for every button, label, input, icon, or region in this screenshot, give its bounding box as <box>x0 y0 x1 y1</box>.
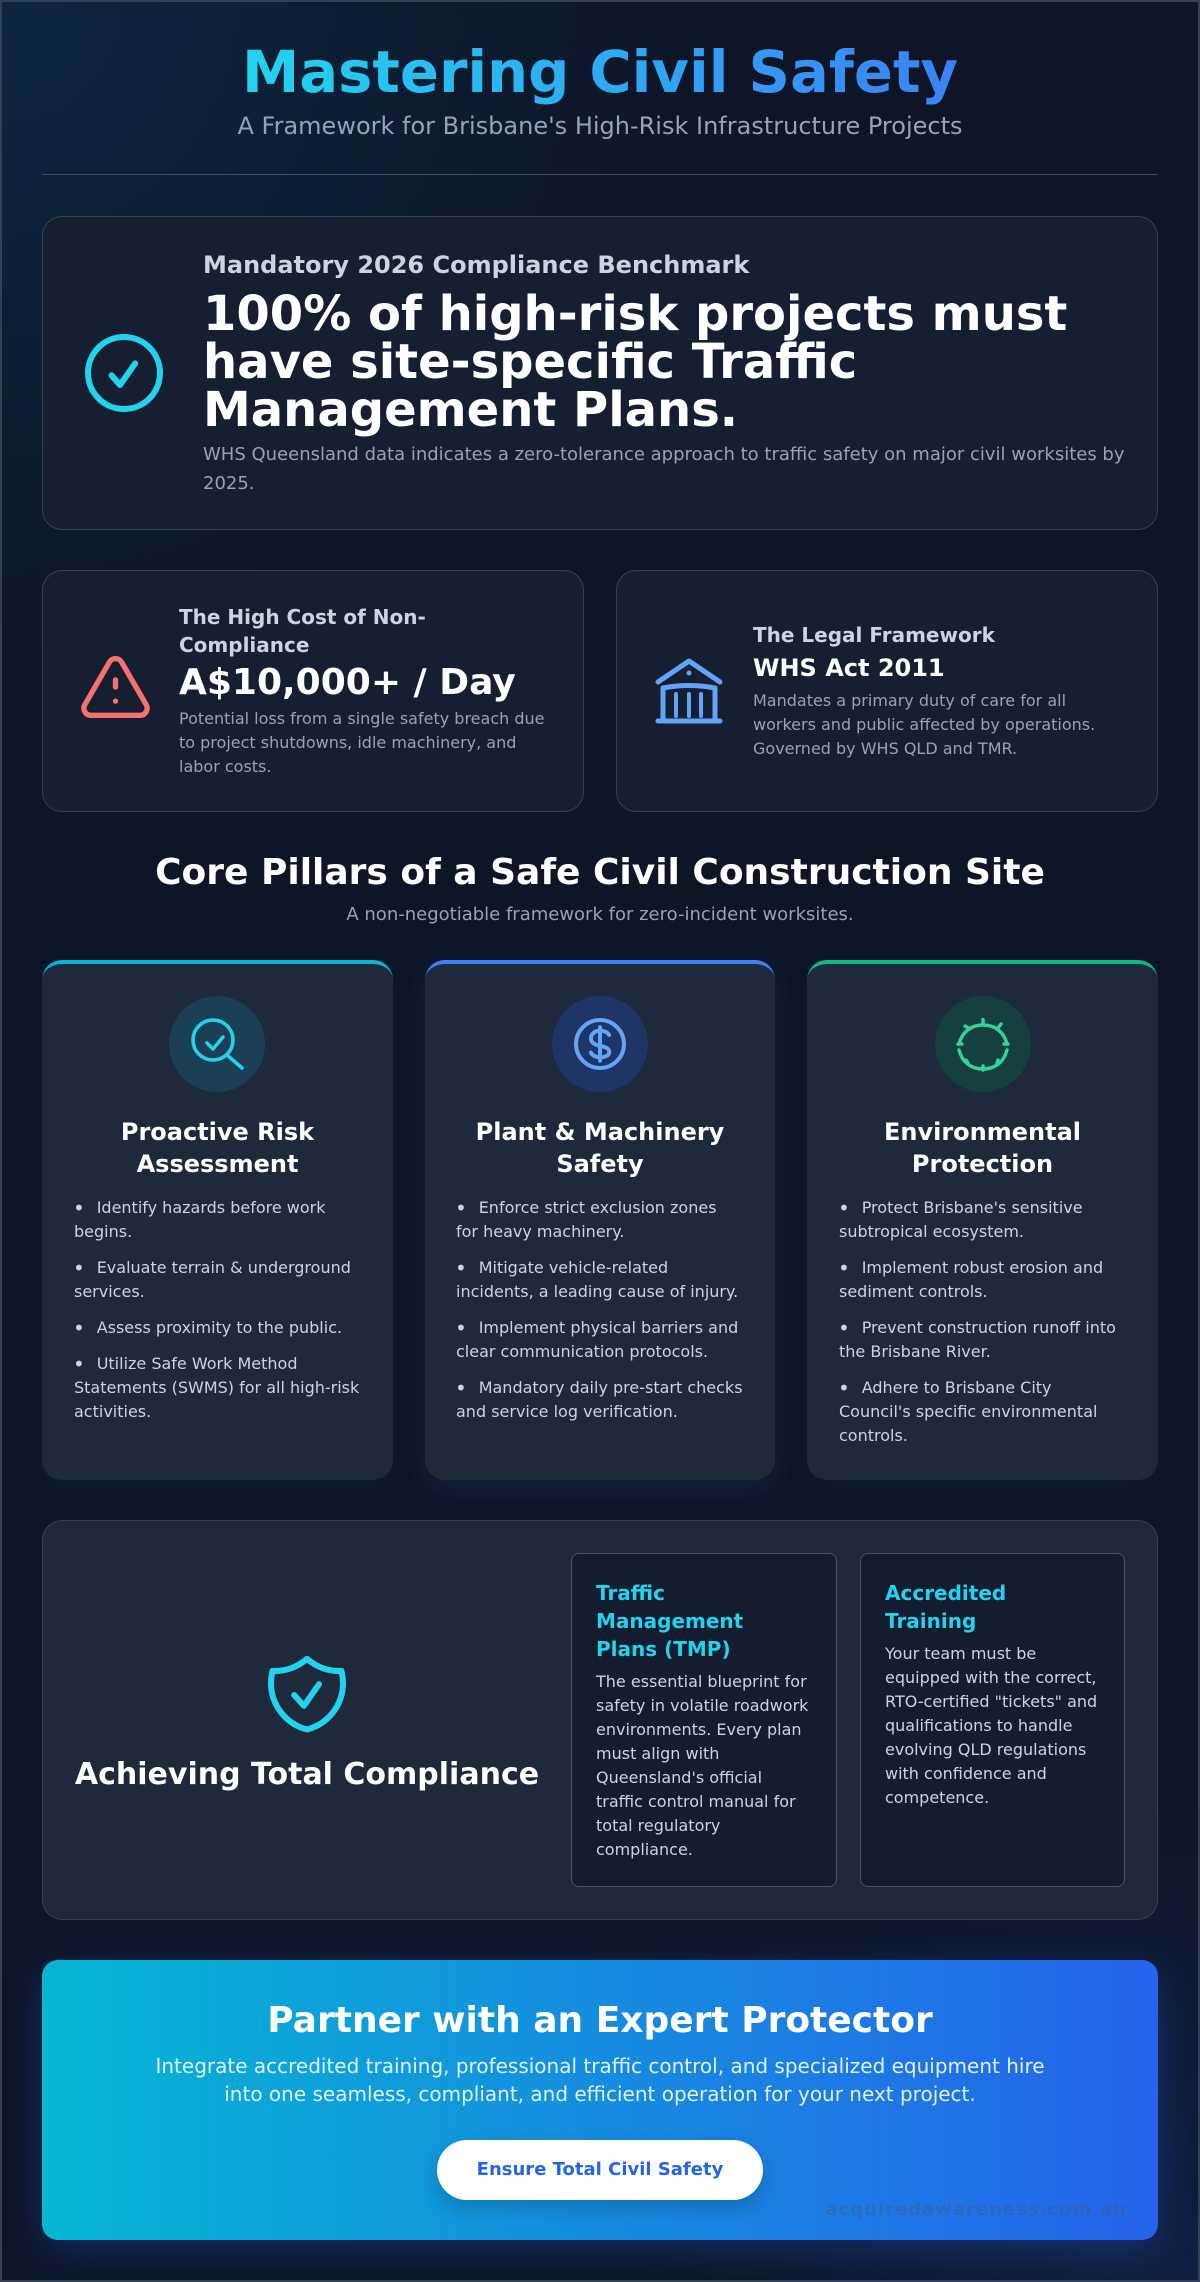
watermark: acquiredawareness.com.au <box>825 2199 1127 2220</box>
card text <box>885 1644 1097 1807</box>
benchmark description: WHS Queensland data indicates a zero-tolerance approach to traffic safety on major civil worksites by <box>203 444 1125 465</box>
legal description <box>753 691 1095 758</box>
cta text <box>155 2054 1045 2106</box>
pillar heading: Environmental <box>884 1118 1081 1146</box>
card title: Training <box>885 1609 976 1633</box>
button: Ensure Total Civil Safety <box>477 2159 723 2180</box>
card text: compliance. <box>596 1840 693 1859</box>
pillar list: sediment controls. Prevent construction runoff into <box>839 1282 1116 1337</box>
pillar list: • <box>73 1352 85 1376</box>
card: accredited training <box>860 1553 1125 1887</box>
pillar list: • <box>838 1196 850 1220</box>
legal description: Mandates a primary duty of care for all <box>753 691 1066 710</box>
legal description: workers and public affected by operations. <box>753 715 1095 734</box>
card title: Management <box>596 1609 743 1633</box>
pillar heading: Proactive Risk <box>121 1118 314 1146</box>
cost label: The High Cost of Non- <box>179 605 426 629</box>
icon: check circle <box>85 334 163 412</box>
pillar list: Enforce strict exclusion zones <box>479 1198 717 1217</box>
icon badge <box>935 996 1031 1092</box>
card title: Accredited <box>885 1581 1006 1605</box>
button <box>437 2140 763 2200</box>
icon: warning triangle <box>81 656 150 718</box>
benchmark description: 2025. <box>203 473 255 494</box>
panel: plant and machinery safety <box>425 960 775 1480</box>
pillar list: • <box>838 1376 850 1400</box>
card title: Traffic <box>596 1581 665 1605</box>
pillar heading: Assessment <box>137 1150 298 1178</box>
panel: call to action <box>42 1960 1158 2240</box>
card text: must align with <box>596 1744 719 1763</box>
benchmark statement: have site-specific Traffic <box>203 334 857 390</box>
card text: Queensland's official <box>596 1768 762 1787</box>
legal value: WHS Act 2011 <box>753 654 945 682</box>
legal description: Governed by WHS QLD and TMR. <box>753 739 1017 758</box>
panel: cost of non-compliance <box>42 570 584 812</box>
pillar list: services. Assess proximity to the public. Utilize Safe Work Method <box>74 1282 342 1373</box>
card text: qualifications to handle <box>885 1716 1072 1735</box>
cta text: into one seamless, compliant, and efficient operation for your next project. <box>224 2082 976 2106</box>
icon: dollar circle <box>574 1018 626 1070</box>
pillar list: subtropical ecosystem. Implement robust erosion and <box>839 1222 1103 1277</box>
card text: with confidence and <box>885 1764 1047 1783</box>
pillar heading: Safety <box>556 1150 644 1178</box>
card text: equipped with the correct, <box>885 1668 1096 1687</box>
section title: Core Pillars of a Safe Civil Construction Site <box>155 852 1045 893</box>
card text: competence. <box>885 1788 989 1807</box>
card title <box>885 1581 1006 1633</box>
cost description <box>179 709 544 776</box>
panel: legal framework <box>616 570 1158 812</box>
pillar list: for heavy machinery. Mitigate vehicle-related <box>456 1222 668 1277</box>
benchmark description <box>203 444 1125 494</box>
cost value: A$10,000+ / Day <box>179 662 516 703</box>
card text <box>596 1672 808 1859</box>
pillar list: Council's specific environmental <box>839 1402 1097 1421</box>
pillar heading <box>476 1118 724 1178</box>
pillar list: • <box>73 1196 85 1220</box>
card: traffic management plans <box>571 1553 837 1887</box>
icon: courthouse <box>656 658 722 724</box>
icon: shield check <box>268 1656 346 1732</box>
pillar list: controls. <box>839 1426 908 1445</box>
pillar list: Protect Brisbane's sensitive <box>862 1198 1083 1217</box>
pillar list: • <box>455 1256 467 1280</box>
icon badge <box>169 996 265 1092</box>
pillar list: begins. Evaluate terrain & underground <box>74 1222 351 1277</box>
card text: Your team must be <box>885 1644 1036 1663</box>
pillar heading: Protection <box>912 1150 1053 1178</box>
card text: traffic control manual for <box>596 1792 796 1811</box>
icon: magnifier check <box>191 1018 244 1070</box>
panel: compliance benchmark <box>42 216 1158 530</box>
pillar list: the Brisbane River. Adhere to Brisbane City <box>839 1342 1052 1397</box>
pillar heading <box>121 1118 314 1178</box>
pillar list: • <box>455 1196 467 1220</box>
benchmark label: Mandatory 2026 Compliance Benchmark <box>203 251 749 279</box>
pillar list <box>838 1196 1116 1445</box>
pillar heading <box>884 1118 1081 1178</box>
benchmark statement <box>203 286 1067 438</box>
pillar list: incidents, a leading cause of injury. Implement physical barriers and <box>456 1282 738 1337</box>
pillar list: • <box>455 1376 467 1400</box>
card text: environments. Every plan <box>596 1720 802 1739</box>
cost label <box>179 605 426 657</box>
card text: The essential blueprint for <box>596 1672 807 1691</box>
pillar list: • <box>838 1256 850 1280</box>
pillar list: • <box>73 1256 85 1280</box>
card text: safety in volatile roadwork <box>596 1696 808 1715</box>
pillar list: • <box>73 1316 85 1340</box>
pillar list <box>73 1196 360 1421</box>
heading: core pillars <box>155 852 1045 925</box>
compliance heading: Achieving Total Compliance <box>75 1757 539 1792</box>
card title: Plans (TMP) <box>596 1637 731 1661</box>
icon: ecosystem <box>956 1018 1010 1072</box>
title: Mastering Civil Safety <box>242 39 958 106</box>
cta text: Integrate accredited training, professional traffic control, and specialized equipment hire <box>155 2054 1045 2078</box>
card text: total regulatory <box>596 1816 720 1835</box>
panel: proactive risk assessment <box>42 960 393 1480</box>
cost description: Potential loss from a single safety breach due <box>179 709 544 728</box>
panel: environmental protection <box>807 960 1158 1480</box>
pillar list: • <box>838 1316 850 1340</box>
pillar list: clear communication protocols. Mandatory daily pre-start checks <box>456 1342 743 1397</box>
benchmark statement: Management Plans. <box>203 382 738 438</box>
cost label: Compliance <box>179 633 309 657</box>
benchmark statement: 100% of high-risk projects must <box>203 286 1067 342</box>
cta heading: Partner with an Expert Protector <box>267 2000 933 2041</box>
pillar list: Identify hazards before work <box>97 1198 326 1217</box>
icon badge <box>552 996 648 1092</box>
cost description: to project shutdowns, idle machinery, and <box>179 733 516 752</box>
pillar list: • <box>455 1316 467 1340</box>
cost description: labor costs. <box>179 757 271 776</box>
header <box>42 39 1158 175</box>
card title <box>596 1581 743 1661</box>
legal label: The Legal Framework <box>753 623 995 647</box>
pillar list: and service log verification. <box>456 1402 678 1421</box>
pillar heading: Plant & Machinery <box>476 1118 724 1146</box>
pillar list: Statements (SWMS) for all high-risk <box>74 1378 359 1397</box>
card text: evolving QLD regulations <box>885 1740 1086 1759</box>
pillar list <box>455 1196 743 1421</box>
card text: RTO-certified "tickets" and <box>885 1692 1097 1711</box>
subtitle: A Framework for Brisbane's High-Risk Infrastructure Projects <box>238 112 962 140</box>
section subtitle: A non-negotiable framework for zero-incident worksites. <box>346 904 854 925</box>
pillar list: activities. <box>74 1402 151 1421</box>
panel: achieving total compliance <box>42 1520 1158 1920</box>
